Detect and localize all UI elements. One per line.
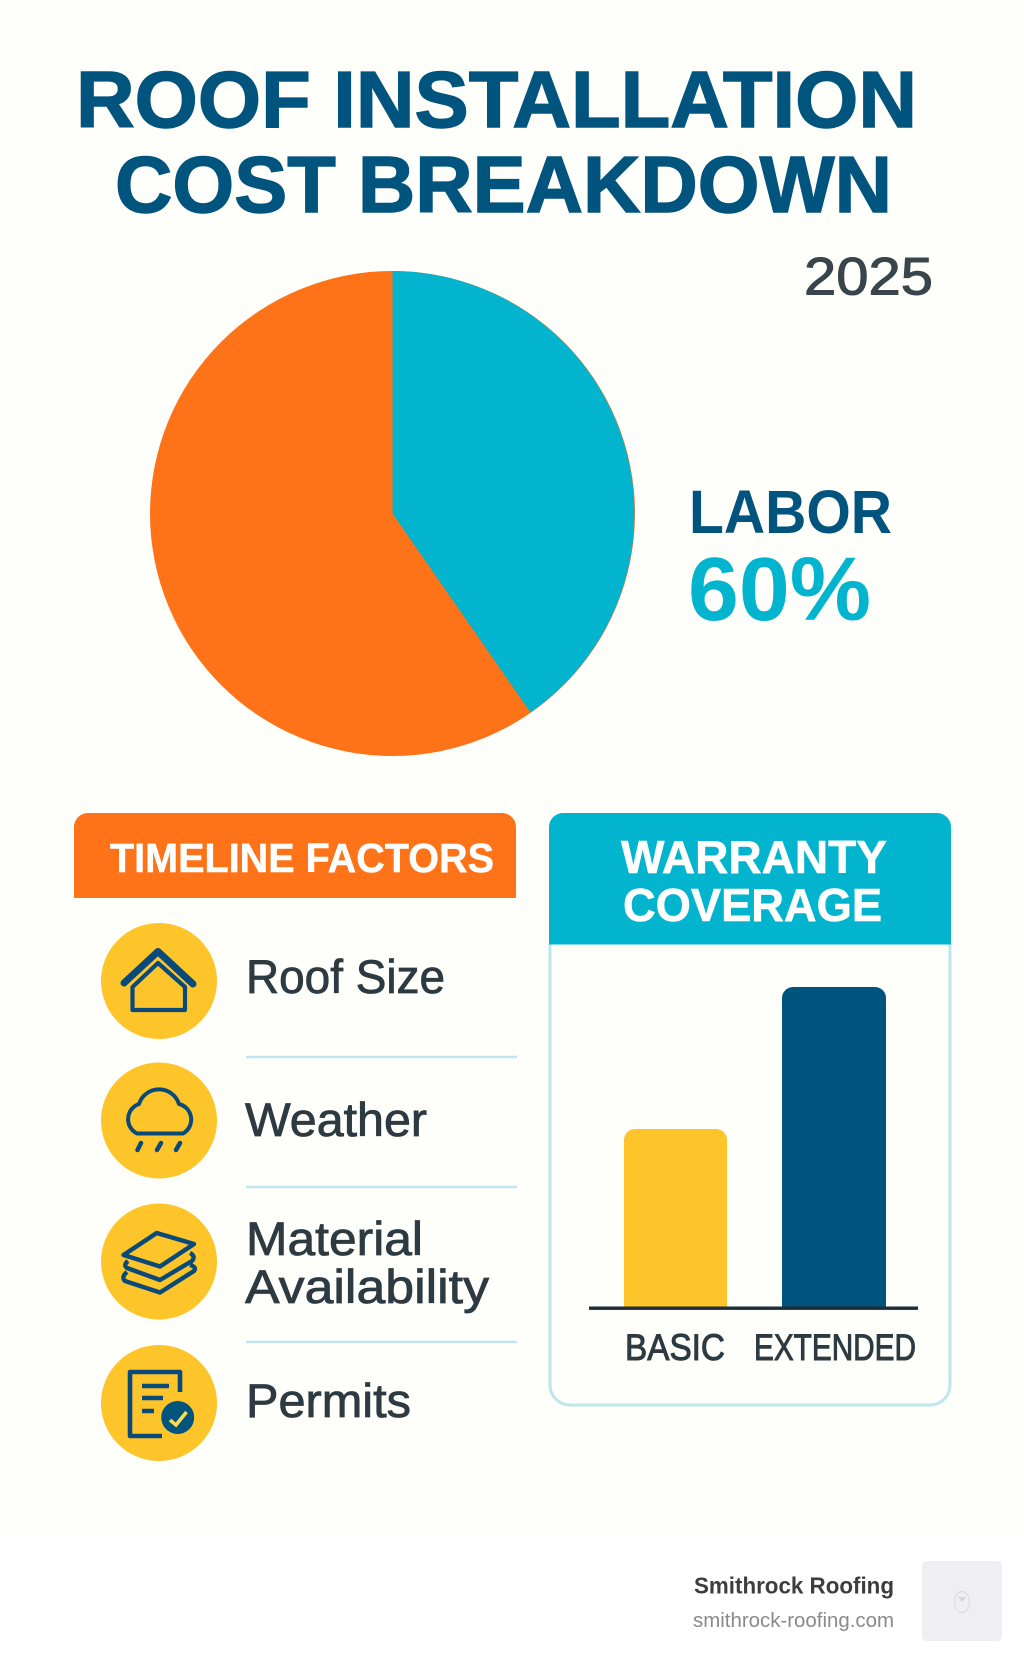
warranty heading [549, 813, 951, 944]
warranty heading: WARRANTY [621, 831, 887, 883]
icon: material layers [101, 1204, 217, 1320]
timeline heading [74, 813, 516, 898]
pie chart [150, 271, 635, 756]
bar chart [589, 987, 918, 1368]
icon: logo placeholder [922, 1561, 1002, 1641]
label: material availability: Material [246, 1212, 423, 1265]
label: extended: EXTENDED [754, 1327, 916, 1368]
icon: permit document [101, 1345, 217, 1461]
label: roof size: Roof Size [246, 950, 445, 1003]
callout: labor share: 60% [688, 540, 871, 640]
company url: smithrock-roofing.com [693, 1610, 894, 1632]
panel: warranty coverage [549, 813, 951, 1405]
timeline heading: TIMELINE FACTORS [110, 835, 494, 881]
label: permits: Permits [246, 1374, 411, 1427]
year label: 2025 [804, 248, 933, 306]
title: COST BREAKDOWN [115, 140, 892, 229]
bar: basic [624, 1129, 727, 1308]
panel: timeline factors [74, 813, 517, 1461]
title: ROOF INSTALLATION [76, 55, 917, 144]
label: basic: BASIC [625, 1327, 725, 1368]
callout: labor share: LABOR [689, 478, 892, 546]
label: material availability [245, 1212, 490, 1313]
warranty heading: COVERAGE [623, 879, 882, 931]
axis baseline [589, 1306, 918, 1310]
label: material availability: Availability [245, 1260, 490, 1313]
label: weather: Weather [245, 1093, 427, 1146]
title [76, 55, 917, 229]
icon: house [101, 923, 217, 1039]
footer branding [693, 1561, 1002, 1641]
bar: extended [782, 987, 886, 1308]
company name: Smithrock Roofing [694, 1572, 894, 1598]
icon: rain cloud [101, 1062, 217, 1178]
callout: labor share [688, 478, 892, 640]
